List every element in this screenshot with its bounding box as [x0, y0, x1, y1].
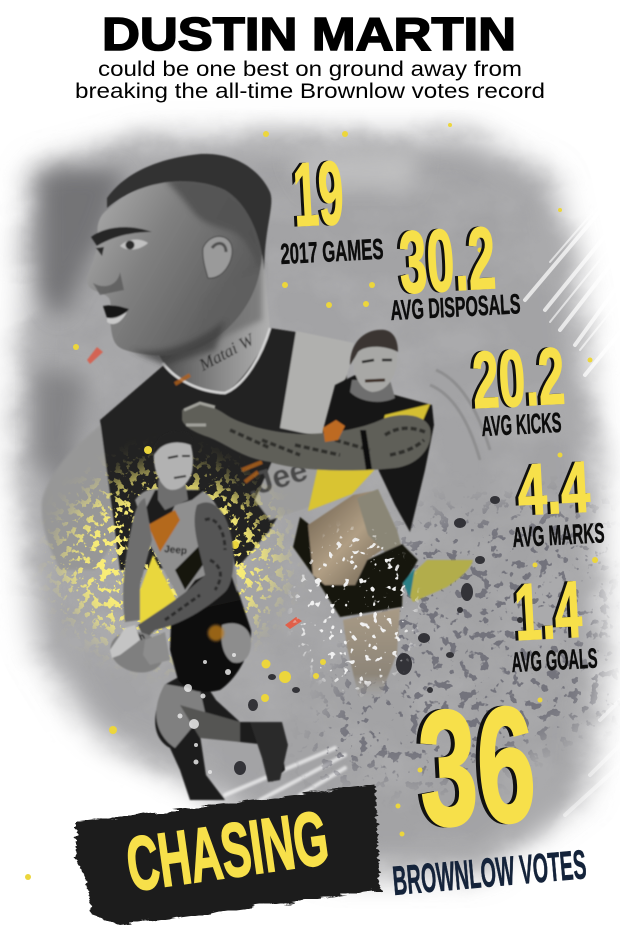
runner: neck	[158, 480, 188, 510]
portrait: nose shadow	[93, 272, 124, 295]
splatter: scattered yellow dots	[25, 123, 598, 880]
small running Martin figure	[106, 431, 288, 800]
runner: football	[106, 626, 168, 678]
runner: logo on jersey: Jeep	[164, 544, 187, 557]
portrait: jersey dark body	[100, 328, 350, 570]
kicker: sock	[384, 544, 418, 584]
kicker: hair	[350, 330, 398, 365]
portrait: head shape	[87, 172, 262, 355]
small running Martin figure: Sh	[132, 631, 146, 645]
subtitle: could be one best on ground away from	[98, 57, 522, 81]
runner: shorts	[170, 585, 251, 692]
kicker: yellow-green boot	[403, 560, 473, 602]
white particle overlay on kicker legs	[288, 524, 421, 696]
splatter: large dark paint blobs	[234, 496, 523, 775]
splatter: red paint flecks	[285, 617, 302, 629]
kicker: yellow shoulder strip	[380, 404, 430, 432]
portrait: jaw shadow	[130, 320, 225, 365]
runner: left arm	[123, 498, 152, 622]
title: DUSTIN MARTIN	[102, 8, 516, 60]
large portrait of Martin in greyscale	[42, 154, 354, 570]
stat: 36 Brownlow votes target	[391, 672, 588, 904]
kicker: raised thigh	[308, 490, 398, 585]
portrait: mouth	[103, 305, 129, 318]
stat: 19 2017 games: 19	[291, 143, 346, 246]
stat: 4.4 average marks: 4.4	[516, 447, 592, 531]
kicking Martin figure	[182, 330, 490, 703]
runner: trailing leg	[155, 668, 285, 800]
stat: 19 2017 games	[280, 143, 384, 271]
runner: tattooed right arm	[138, 502, 234, 640]
portrait: hair	[107, 154, 271, 270]
subtitle: breaking the all-time Brownlow votes record	[75, 79, 545, 103]
stat: 36 Brownlow votes target: 36	[410, 672, 536, 861]
stat: 4.4 average marks: 4.4	[513, 447, 589, 531]
stat: 36 Brownlow votes target: 36	[414, 672, 540, 861]
portrait: brow and eye	[91, 227, 152, 246]
stat: 20.2 average kicks	[467, 331, 567, 442]
stat: 30.2 average disposals: AVG DISPOSALS	[390, 288, 521, 326]
portrait: left shoulder	[42, 423, 115, 570]
kicker: shorts	[293, 517, 403, 617]
kicker: neck	[350, 380, 395, 402]
portrait: V collar	[163, 328, 270, 393]
runner: hair	[154, 431, 193, 455]
runner: boot	[250, 722, 288, 782]
portrait: ear	[203, 236, 232, 278]
stat: 30.2 average disposals	[390, 208, 521, 326]
background: white brush streaks	[225, 185, 620, 815]
kicker: head	[353, 337, 397, 392]
kicker: orange patch on jersey	[323, 420, 345, 442]
portrait: Jeep logo on jersey: .Jee	[242, 451, 312, 504]
portrait: shaved side of head shade	[165, 177, 262, 270]
kicker: black jersey body	[320, 375, 434, 532]
stat: 30.2 average disposals: 30.2	[394, 208, 495, 312]
portrait: orange flecks	[175, 375, 262, 482]
kicker: yellow jersey below arm	[308, 462, 378, 511]
banner: black brush with Chasing	[76, 785, 380, 925]
portrait: white jersey panel	[280, 331, 354, 440]
kicker: outstretched tattooed arm	[182, 405, 431, 470]
runner: hands	[110, 625, 140, 658]
runner: head	[154, 434, 193, 490]
kicker: standing leg	[343, 608, 400, 703]
splatter: dark paint flecks	[296, 488, 617, 794]
runner: jersey	[135, 488, 237, 610]
stat: 30.2 average disposals: 30.2	[397, 208, 498, 312]
kicker: tattooed knee and shin	[357, 489, 401, 552]
runner: yellow gap under arm	[140, 555, 180, 625]
stat: 19 2017 games: 2017 GAMES	[280, 234, 384, 271]
banner: Chasing label: CHASING	[122, 796, 333, 908]
kicker: gray tattoo swirl behind	[430, 370, 490, 460]
splatter: white dots over runner legs	[178, 653, 236, 774]
splatter: yellow paint burst	[48, 446, 292, 665]
stat: 1.4 average goals	[509, 565, 598, 678]
portrait: neck	[150, 240, 270, 392]
subtitle	[75, 57, 545, 103]
portrait: neck tattoo: Matai W	[195, 329, 259, 375]
stat: 19 2017 games: 19	[288, 143, 343, 246]
